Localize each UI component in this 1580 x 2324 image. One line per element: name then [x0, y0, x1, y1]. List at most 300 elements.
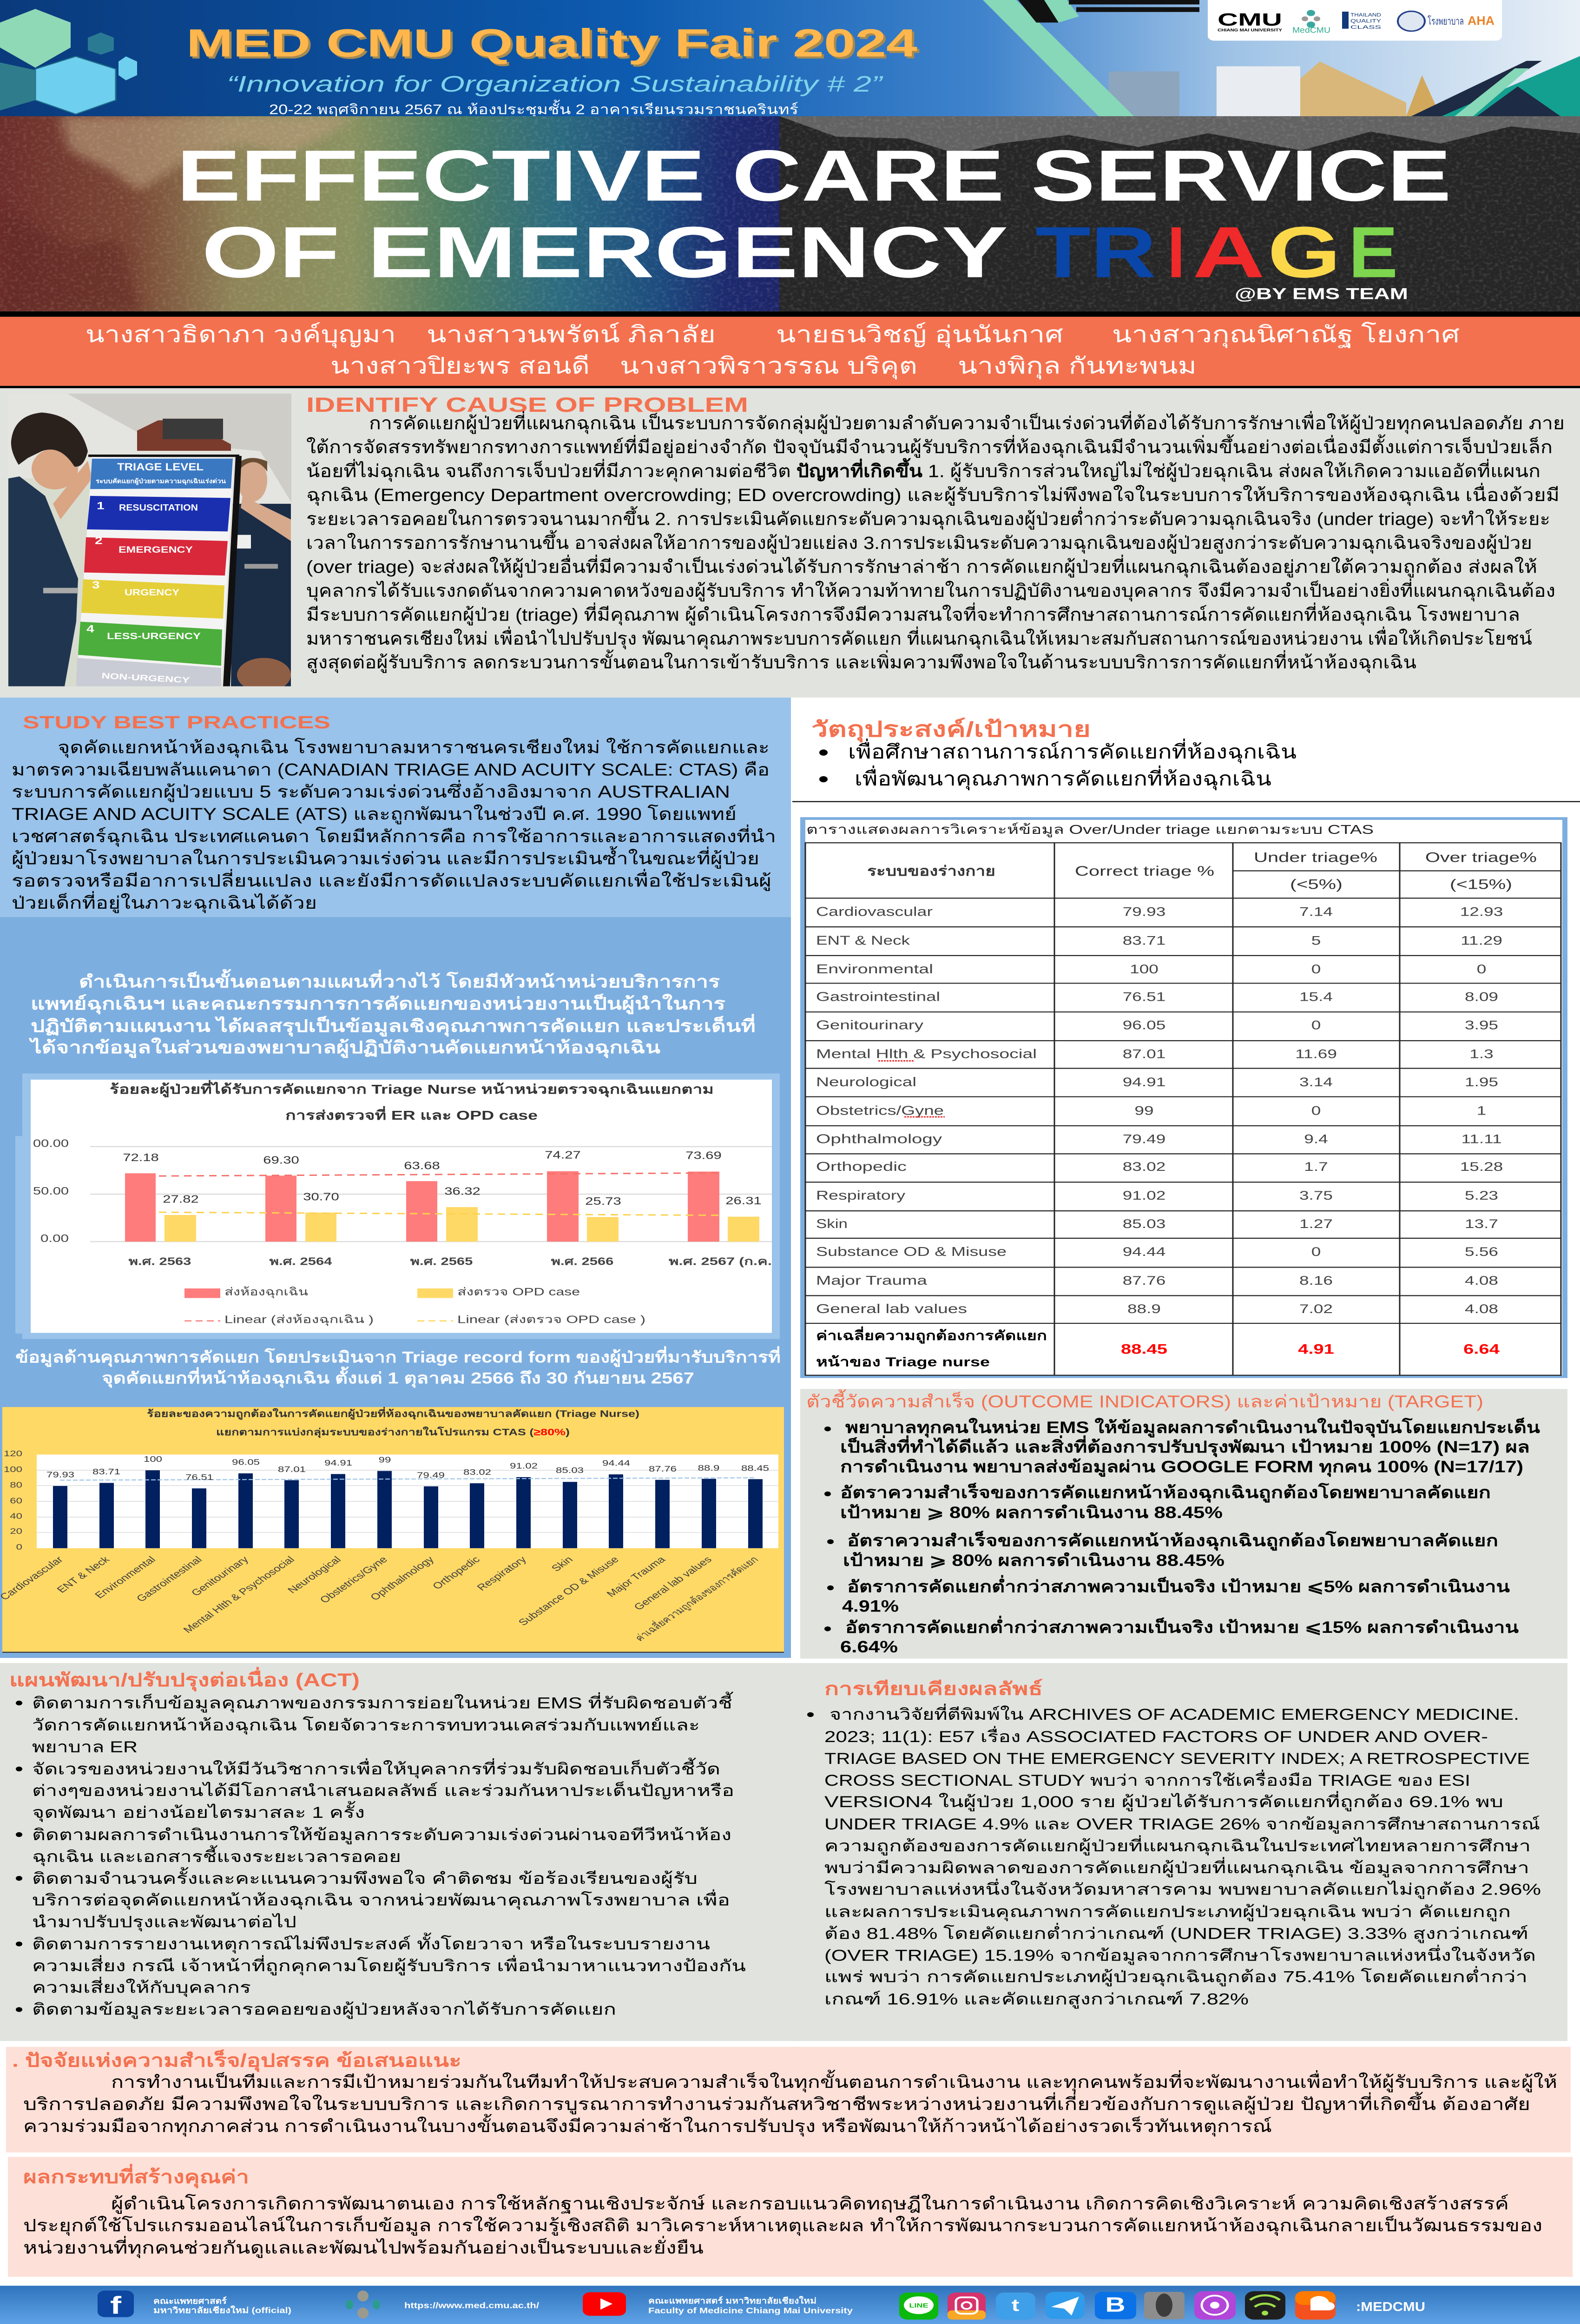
- category labels: พ.ศ. 2565: [410, 1255, 473, 1267]
- benchmarking paragraph: พบว่ามีความผิดพลาดของการคัดแยกผู้ป่วยที่แผนกฉุกเฉิน ข้อมูลจากการศึกษา: [824, 1857, 1529, 1877]
- y axis labels: 00.00: [33, 1137, 69, 1149]
- legend: Linear (ส่งห้องฉุกเฉิน ): [224, 1313, 374, 1326]
- triage level stripes: ระบบคัดแยกผู้ป่วยตามความฉุกเฉินเร่งด่วน: [96, 478, 226, 486]
- objective list: [819, 739, 1297, 791]
- implementation paragraph: แพทย์ฉุกเฉินฯ และคณะกรรมการการคัดแยกของหน่วยงานเป็นผู้นำในการ: [31, 993, 725, 1015]
- triage level stripes: 3: [92, 579, 100, 591]
- table rows: 0: [1311, 1018, 1321, 1032]
- table rows: 11.69: [1295, 1047, 1337, 1061]
- legend: Linear (ส่งตรวจ OPD case ): [457, 1313, 645, 1325]
- benchmarking paragraph: 2023; 11(1): E57 เรื่อง ASSOCIATED FACTORS OF UNDER AND OVER-: [824, 1726, 1488, 1745]
- table rows: 85.03: [1123, 1217, 1165, 1231]
- table rows: 12.93: [1460, 905, 1503, 918]
- chart title: การส่งตรวจที่ ER และ OPD case: [285, 1106, 538, 1123]
- value labels: 83.02: [463, 1468, 491, 1477]
- category labels: พ.ศ. 2567 (ก.ค.: [669, 1255, 772, 1267]
- rotated category labels: Ophthalmology: [368, 1554, 436, 1602]
- table rows: 1.3: [1469, 1047, 1494, 1061]
- rotated category labels: Neurological: [285, 1554, 343, 1595]
- improvement list: ติดตามข้อมูลระยะเวลารอคอยของผู้ป่วยหลังจากได้รับการคัดแยก: [32, 2000, 616, 2019]
- logo box: THAILAND: [1350, 12, 1381, 18]
- panel: implementation and results: [0, 917, 791, 1658]
- coloured word TRIAGE: A: [1192, 212, 1265, 293]
- table rows: Cardiovascular: [816, 905, 933, 919]
- divider band: [0, 311, 1580, 317]
- objective list: เพื่อศึกษาสถานการณ์การคัดแยกที่ห้องฉุกเฉิน: [848, 739, 1297, 764]
- benchmarking paragraph: [807, 1703, 1541, 2009]
- table rows: 9.4: [1304, 1132, 1328, 1146]
- improvement list: จัดเวรของหน่วยงานให้มีวันวิชาการเพื่อให้บุคลากรที่ร่วมรับผิดชอบเก็บตัวชี้วัด: [32, 1758, 720, 1779]
- benchmarking paragraph: CROSS SECTIONAL STUDY พบว่า จากการใช้เครื่องมือ TRIAGE ของ ESI: [824, 1769, 1470, 1789]
- indicator list: การดำเนินงาน พยาบาลส่งข้อมูลผ่าน GOOGLE FORM ทุกคน 100% (N=17/17): [840, 1458, 1523, 1477]
- coloured word TRIAGE: I: [1167, 212, 1185, 293]
- heading: STUDY BEST PRACTICES: [23, 713, 330, 732]
- table average row: 4.91: [1298, 1342, 1334, 1357]
- chart title: [147, 1407, 639, 1439]
- triage level stripes: [76, 459, 233, 686]
- benchmarking paragraph: VERSION4 ในผู้ป่วย 1,000 ราย ผู้ป่วยได้รับการคัดแยกที่ถูกต้อง 69.1% พบ: [824, 1791, 1503, 1811]
- logo box: QUALITY: [1350, 18, 1381, 24]
- table header: (<15%): [1450, 877, 1512, 892]
- icon: facebook: [98, 2291, 134, 2319]
- table rows: 96.05: [1123, 1018, 1165, 1032]
- value labels: 100: [144, 1455, 162, 1464]
- table rows: [816, 905, 1503, 1316]
- table average row: 6.64: [1463, 1342, 1500, 1357]
- y axis labels: [33, 1137, 69, 1244]
- improvement list: ความเสี่ยง กรณี เจ้าหน้าที่ถูกคุกคามโดยผู้รับบริการ เพื่อนำมาหาแนวทางป้องกัน: [32, 1955, 746, 1975]
- table rows: Obstetrics/Gyne: [816, 1103, 944, 1118]
- benchmarking paragraph: โรงพยาบาลแห่งหนึ่งในจังหวัดมหาสารคาม พบพยาบาลคัดแยกไม่ถูกต้อง 2.96%: [824, 1878, 1541, 1899]
- coloured word TRIAGE: G: [1268, 212, 1341, 293]
- bars: [53, 1470, 763, 1548]
- indicator list: [824, 1418, 1540, 1656]
- y axis labels: 100: [4, 1465, 22, 1474]
- header date line: 20-22 พฤศจิกายน 2567 ณ ห้องประชุมชั้น 2 อาคารเรียนรวมราชนครินทร์: [269, 99, 798, 118]
- table rows: 5.23: [1465, 1188, 1498, 1202]
- indicator list: 4.91%: [842, 1597, 899, 1615]
- value labels: 88.9: [698, 1464, 719, 1472]
- implementation paragraph: ปฏิบัติตามแผนงาน ได้ผลสรุปเป็นข้อมูลเชิงคุณภาพการคัดแยก และประเด็นที่: [31, 1014, 756, 1037]
- table rows: 8.09: [1465, 990, 1498, 1004]
- target line: [60, 1478, 756, 1480]
- logo box: MedCMU: [1292, 26, 1330, 35]
- improvement list: ฉุกเฉิน และเอกสารชี้แจงระยะเวลารอคอย: [32, 1845, 401, 1866]
- improvement list: [16, 1692, 746, 2019]
- legend: ส่งตรวจ OPD case: [457, 1286, 580, 1298]
- value labels: 87.01: [278, 1465, 306, 1474]
- table average row: หน้าของ Triage nurse: [816, 1355, 990, 1369]
- panel: outcome indicators: [800, 1389, 1567, 1658]
- value labels: 73.69: [685, 1149, 722, 1161]
- table rows: 13.7: [1465, 1217, 1498, 1231]
- table rows: 3.14: [1299, 1075, 1333, 1089]
- logo box: CHIANG MAI UNIVERSITY: [1218, 28, 1283, 33]
- authors band: นางสาวกุณนิศาณัฐ โยงกาศ: [1112, 322, 1460, 348]
- table rows: 83.02: [1123, 1160, 1165, 1174]
- chart title: [110, 1080, 714, 1123]
- logo box: AHA: [1468, 13, 1494, 28]
- table header: Under triage%: [1254, 850, 1377, 865]
- buildings: [1109, 61, 1441, 116]
- logo box: [1208, 0, 1502, 40]
- table rows: 1.95: [1465, 1075, 1498, 1089]
- rotated category labels: Gastrointestinal: [134, 1554, 204, 1604]
- indicator list: เป้าหมาย ⩾ 80% ผลการดำเนินงาน 88.45%: [840, 1503, 1223, 1522]
- table rows: Environmental: [816, 962, 933, 977]
- heading: แผนพัฒนา/ปรับปรุงต่อเนื่อง (ACT): [9, 1667, 360, 1691]
- heading: ตัวชี้วัดความสำเร็จ (OUTCOME INDICATORS) และค่าเป้าหมาย (TARGET): [806, 1389, 1483, 1411]
- value labels: 26.31: [725, 1195, 762, 1207]
- byline: @BY EMS TEAM: [1235, 284, 1408, 303]
- value labels: 88.45: [741, 1464, 769, 1473]
- y axis labels: 20: [10, 1527, 22, 1536]
- improvement list: ความเสี่ยงให้กับบุคลากร: [32, 1976, 251, 1997]
- panel: benchmarking results: [790, 1663, 1567, 2041]
- divider band 2: [0, 386, 1580, 388]
- table rows: 7.02: [1299, 1302, 1333, 1316]
- value labels: 91.02: [510, 1461, 538, 1471]
- benchmarking paragraph: (OVER TRIAGE) 15.19% จากข้อมูลจากการศึกษาโรงพยาบาลแห่งหนึ่งในจังหวัด: [824, 1944, 1536, 1965]
- social icons: LINE: [909, 2303, 928, 2309]
- chart title: ร้อยละผู้ป่วยที่ได้รับการคัดแยกจาก Triage Nurse หน้าหน่วยตรวจฉุกเฉินแยกตาม: [110, 1080, 714, 1097]
- table rows: 1: [1477, 1103, 1486, 1117]
- table rows: ENT & Neck: [816, 933, 910, 948]
- logo box: โรงพยาบาล: [1428, 15, 1464, 27]
- body paragraph: มาตรความเฉียบพลันแคนาดา (CANADIAN TRIAGE AND ACUITY SCALE: CTAS) คือ: [12, 760, 770, 779]
- chart: ER vs OPD by year: [15, 1074, 780, 1339]
- body paragraph: ความร่วมมือจากทุกภาคส่วน การดำเนินงานในบางขั้นตอนจึงมีความล่าช้าในการปรับปรุง หรือพัฒนาให้ก้าวหน้าได้อย่างรวดเร็วทันเหตุการณ์: [23, 2113, 1272, 2137]
- table rows: 0: [1311, 1245, 1321, 1259]
- table rows: General lab values: [816, 1302, 967, 1316]
- table header: (<5%): [1290, 877, 1343, 892]
- header title: MED CMU Quality Fair 2024: [186, 21, 917, 65]
- y axis labels: 0: [16, 1543, 22, 1552]
- rotated category labels: Respiratory: [474, 1554, 529, 1592]
- value labels: 69.30: [263, 1154, 299, 1166]
- logo box: CMU: [1218, 10, 1282, 30]
- triage level stripes: LESS-URGENCY: [107, 631, 201, 641]
- icon: facebook: f: [110, 2292, 122, 2319]
- value labels: 30.70: [303, 1190, 339, 1202]
- value labels: 76.51: [185, 1473, 213, 1482]
- benchmarking paragraph: ความถูกต้องของการคัดแยกผู้ป่วยที่แผนกฉุกเฉินในประเทศไทยหลายการศึกษา: [824, 1835, 1531, 1855]
- rotated category labels: Obstetrics/Gyne: [317, 1554, 390, 1605]
- header subtitle: “Innovation for Organization Sustainability # 2”: [227, 72, 883, 97]
- body paragraph: ป่วยเด็กที่อยู่ในภาวะฉุกเฉินได้ด้วย: [12, 891, 317, 913]
- coloured word TRIAGE: E: [1349, 212, 1398, 293]
- heading: IDENTIFY CAUSE OF PROBLEM: [306, 394, 748, 416]
- body paragraph: TRIAGE AND ACUITY SCALE (ATS) และถูกพัฒนาในช่วงปี ค.ศ. 1990 โดยแพทย์: [12, 804, 737, 825]
- table rows: 0: [1311, 1103, 1321, 1117]
- benchmarking paragraph: และผลการประเมินคุณภาพการคัดแยกประเภทผู้ป่วยฉุกเฉิน พบว่า คัดแยกถูก: [824, 1902, 1511, 1921]
- value labels: 79.49: [417, 1471, 445, 1480]
- value labels: 27.82: [163, 1193, 199, 1205]
- photo: staff holding triage level banner: [8, 394, 291, 692]
- value labels: [123, 1149, 762, 1207]
- main title line 2: OF EMERGENCY: [202, 212, 1008, 293]
- table rows: 76.51: [1123, 990, 1165, 1004]
- authors band: นางสาวพิราวรรณ บริคุต: [620, 354, 917, 380]
- panel: success factors and obstacles: [6, 2047, 1571, 2152]
- panel: study best practices: [0, 698, 791, 917]
- table rows: Orthopedic: [816, 1160, 907, 1174]
- y axis labels: 50.00: [33, 1185, 69, 1197]
- table average row: ค่าเฉลี่ยความถูกต้องการคัดแยก: [816, 1326, 1047, 1344]
- triage level stripes: 4: [86, 623, 94, 634]
- category labels: [129, 1255, 772, 1267]
- heading: วัตถุประสงค์/เป้าหมาย: [811, 718, 1091, 743]
- coloured word TRIAGE: [1035, 212, 1398, 293]
- table rows: 99: [1134, 1103, 1154, 1117]
- improvement list: วัดการคัดแยกหน้าห้องฉุกเฉิน โดยจัดวาระการทบทวนเคสร่วมกับแพทย์และ: [32, 1716, 700, 1735]
- body paragraph: [306, 411, 1565, 673]
- triage level stripes: EMERGENCY: [118, 544, 193, 555]
- youtube label: คณะแพทยศาสตร์ มหาวิทยาลัยเชียงใหม่: [648, 2296, 816, 2305]
- benchmarking paragraph: จากงานวิจัยที่ตีพิมพ์ใน ARCHIVES OF ACADEMIC EMERGENCY MEDICINE.: [830, 1703, 1519, 1723]
- improvement list: ติดตามผลการดำเนินงานการให้ข้อมูลการระดับความเร่งด่วนผ่านจอทีวีหน้าห้อง: [32, 1826, 731, 1844]
- triage level stripes: NON-URGENCY: [101, 672, 190, 685]
- table rows: 15.28: [1460, 1160, 1503, 1174]
- trend lines: [159, 1173, 723, 1215]
- objective list: เพื่อพัฒนาคุณภาพการคัดแยกที่ห้องฉุกเฉิน: [855, 766, 1271, 791]
- value labels: [46, 1455, 769, 1482]
- rotated category labels: Skin: [549, 1554, 575, 1573]
- table rows: Mental Hlth & Psychosocial: [816, 1047, 1037, 1061]
- triage level stripes: 1: [97, 500, 105, 512]
- indicator list: 6.64%: [840, 1637, 898, 1656]
- value labels: 85.03: [556, 1466, 584, 1475]
- icon: hexagon cluster: [0, 9, 137, 114]
- y axis labels: 120: [4, 1449, 22, 1458]
- value labels: 83.71: [92, 1467, 120, 1476]
- caption: triage record form: ข้อมูลด้านคุณภาพการคัดแยก โดยประเมินจาก Triage record form ของผู้ป่วยที่มารับบริการที่: [15, 1346, 781, 1367]
- body paragraph: ระบบการคัดแยกผู้ป่วยแบบ 5 ระดับความเร่งด่วนซึ่งอ้างอิงมาจาก AUSTRALIAN: [12, 780, 730, 802]
- caption: triage record form: จุดคัดแยกที่หน้าห้องฉุกเฉิน ตั้งแต่ 1 ตุลาคม 2566 ถึง 30 กันยายน 2567: [102, 1367, 694, 1388]
- body paragraph: [23, 2070, 1557, 2137]
- rotated category labels: Mental Hlth & Psychosocial: [181, 1554, 297, 1635]
- table rows: 87.76: [1123, 1274, 1165, 1287]
- social icons: [899, 2291, 1336, 2319]
- icon: MedCMU logo: [346, 2291, 380, 2318]
- table rows: Ophthalmology: [816, 1132, 942, 1146]
- table rows: 15.4: [1299, 990, 1333, 1004]
- triage level stripes: 2: [95, 535, 103, 547]
- improvement list: ต่างๆของหน่วยงานได้มีโอกาสนำเสนอผลลัพธ์ และร่วมกันหาประเด็นปัญหาหรือ: [32, 1781, 734, 1800]
- value labels: 99: [379, 1455, 391, 1465]
- benchmarking paragraph: ต้อง 81.48% โดยคัดแยกต่ำกว่าเกณฑ์ (UNDER TRIAGE) 3.33% สูงกว่าเกณฑ์: [824, 1922, 1528, 1943]
- table rows: Genitourinary: [816, 1018, 923, 1032]
- legend: ส่งห้องฉุกเฉิน: [224, 1286, 308, 1298]
- benchmarking paragraph: UNDER TRIAGE 4.9% และ OVER TRIAGE 26% จากข้อมูลการศึกษาสถานการณ์: [824, 1815, 1540, 1834]
- y axis labels: 60: [10, 1496, 22, 1505]
- implementation paragraph: ได้จากข้อมูลในส่วนของพยาบาลผู้ปฏิบัติงานคัดแยกหน้าห้องฉุกเฉิน: [29, 1037, 660, 1058]
- value labels: 79.93: [46, 1471, 74, 1479]
- table rows: 7.14: [1299, 905, 1333, 918]
- panel: objectives: [792, 718, 1580, 802]
- decorative diagonal stripes: [983, 0, 1580, 116]
- social icons: B: [1105, 2293, 1126, 2317]
- table rows: 11.29: [1461, 933, 1502, 947]
- improvement list: ติดตามจำนวนครั้งและคะแนนความพึงพอใจ คำติดชม ข้อร้องเรียนของผู้รับ: [32, 1867, 698, 1888]
- table rows: Major Trauma: [816, 1274, 928, 1288]
- rotated category labels: ENT & Neck: [54, 1554, 112, 1595]
- value labels: 94.91: [324, 1459, 352, 1467]
- y axis labels: [4, 1449, 22, 1552]
- value labels: 36.32: [444, 1185, 481, 1197]
- table rows: 5.56: [1465, 1245, 1498, 1259]
- panel: value and impact: [8, 2157, 1573, 2277]
- heading: . ปัจจัยแห่งความสำเร็จ/อุปสรรค ข้อเสนอแนะ: [12, 2049, 461, 2072]
- y axis labels: 0.00: [40, 1232, 69, 1244]
- authors band: นางสาวนพรัตน์ ภิลาลัย: [427, 322, 716, 347]
- value labels: 94.44: [602, 1459, 630, 1468]
- panel: ACT improvement plan: [0, 1663, 797, 2041]
- table header: [867, 850, 1537, 892]
- table rows: 79.49: [1123, 1132, 1165, 1146]
- implementation paragraph: ดำเนินการเป็นขั้นตอนตามแผนที่วางไว้ โดยมีหัวหน้าหน่วยบริการการ: [79, 969, 720, 991]
- caption: triage record form: [15, 1346, 781, 1388]
- rotated category labels: [0, 1553, 761, 1644]
- triage level stripes: URGENCY: [125, 587, 179, 597]
- table rows: 8.16: [1299, 1274, 1333, 1287]
- value labels: 74.27: [545, 1149, 581, 1161]
- table rows: 88.9: [1127, 1302, 1161, 1316]
- y axis labels: 80: [10, 1481, 22, 1490]
- table rows: 94.91: [1123, 1075, 1165, 1089]
- rotated category labels: Orthopedic: [430, 1554, 482, 1591]
- table header: Correct triage %: [1075, 864, 1214, 879]
- indicator list: อัตราความสำเร็จของการคัดแยกหน้าห้องฉุกเฉินถูกต้องโดยพยาบาลคัดแยก: [840, 1482, 1491, 1503]
- header banner: [0, 0, 1580, 118]
- improvement list: ติดตามการรายงานเหตุการณ์ไม่พึงประสงค์ ทั้งโดยวาจา หรือในระบบรายงาน: [32, 1933, 710, 1954]
- improvement list: จุดพัฒนา อย่างน้อยไตรมาสละ 1 ครั้ง: [32, 1801, 365, 1822]
- icon: youtube: [583, 2292, 626, 2316]
- rotated category labels: General lab values: [631, 1554, 714, 1612]
- improvement list: บริการต่อจุดคัดแยกหน้าห้องฉุกเฉิน จากหน่วยพัฒนาคุณภาพโรงพยาบาล เพื่อ: [32, 1889, 730, 1909]
- indicator list: เป็นสิ่งที่ทำได้ดีแล้ว และสิ่งที่ต้องการปรับปรุงพัฒนา เป้าหมาย 100% (N=17) ผล: [840, 1435, 1530, 1457]
- website url: https://www.med.cmu.ac.th/: [404, 2301, 539, 2310]
- body paragraph: หน่วยงานที่ทุกคนช่วยกันดูแลและพัฒนไปพร้อมกันอย่างเป็นระบบและยั่งยืน: [23, 2236, 704, 2258]
- table rows: Substance OD & Misuse: [816, 1245, 1007, 1259]
- bars: [125, 1171, 759, 1241]
- youtube label: [648, 2296, 853, 2315]
- improvement list: นำมาปรับปรุงและพัฒนาต่อไป: [32, 1913, 296, 1932]
- footer: [0, 2286, 1580, 2324]
- body paragraph: จุดคัดแยกหน้าห้องฉุกเฉิน โรงพยาบาลมหาราชนครเชียงใหม่ ใช้การคัดแยกและ: [58, 738, 770, 758]
- table rows: 1.27: [1299, 1217, 1333, 1231]
- youtube label: Faculty of Medicine Chiang Mai University: [648, 2306, 853, 2315]
- category labels: พ.ศ. 2566: [551, 1255, 613, 1267]
- table header: Over triage%: [1425, 850, 1537, 865]
- table rows: 91.02: [1123, 1188, 1165, 1202]
- heading: ผลกระทบที่สร้างคุณค่า: [23, 2164, 249, 2188]
- improvement list: ติดตามการเก็บข้อมูลคุณภาพของกรรมการย่อยในหน่วย EMS ที่รับผิดชอบตัวชี้: [32, 1692, 734, 1713]
- authors band: นางสาวปิยะพร สอนดี: [330, 354, 590, 379]
- rotated category labels: Major Trauma: [604, 1554, 668, 1599]
- table rows: Skin: [816, 1217, 848, 1231]
- title panel: [0, 116, 1580, 311]
- heading: การเทียบเคียงผลลัพธ์: [824, 1679, 1043, 1699]
- table rows: 4.08: [1465, 1302, 1498, 1316]
- value labels: 63.68: [404, 1159, 440, 1171]
- table rows: Neurological: [816, 1075, 916, 1089]
- chart: triage accuracy by body system: [0, 1407, 784, 1653]
- implementation paragraph: [29, 969, 756, 1058]
- body paragraph: เวชศาสตร์ฉุกเฉิน ประเทศแคนดา โดยมีหลักการคือ การใช้อาการและอาการแสดงที่นำ: [12, 825, 776, 847]
- body paragraph: รอตรวจหรือมีอาการเปลี่ยนแปลง และยังมีการดัดแปลงระบบคัดแยกเพื่อใช้ประเมินผู้: [12, 869, 771, 891]
- table average row: [816, 1326, 1500, 1369]
- panel: data table: [800, 817, 1567, 1378]
- social icons: t: [1012, 2296, 1020, 2315]
- table rows: 11.11: [1461, 1132, 1502, 1146]
- authors band: นางพิกุล กันทะพนม: [958, 354, 1197, 380]
- value labels: 72.18: [123, 1151, 159, 1163]
- benchmarking paragraph: เกณฑ์ 16.91% และคัดแยกสูงกว่าเกณฑ์ 7.82%: [824, 1990, 1249, 2009]
- improvement list: พยาบาล ER: [32, 1738, 138, 1756]
- indicator list: อัตราการคัดแยกต่ำกว่าสภาพความเป็นจริง เป้าหมาย ⩽5% ผลการดำเนินงาน: [847, 1575, 1510, 1596]
- indicator list: อัตราความสำเร็จของการคัดแยกหน้าห้องฉุกเฉินถูกต้องโดยพยาบาลคัดแยก: [847, 1531, 1498, 1551]
- chart title: ร้อยละของความถูกต้องในการคัดแยกผู้ป่วยที่ห้องฉุกเฉินของพยาบาลคัดแยก (Triage Nurse): [147, 1407, 639, 1420]
- body paragraph: [23, 2194, 1542, 2258]
- table rows: 79.93: [1123, 905, 1165, 918]
- authors band: [0, 317, 1580, 386]
- rotated category labels: Genitourinary: [189, 1554, 251, 1598]
- table grid: [805, 843, 1561, 1375]
- table rows: 1.7: [1304, 1160, 1328, 1174]
- indicator list: อัตราการคัดแยกต่ำกว่าสภาพความเป็นจริง เป้าหมาย ⩽15% ผลการดำเนินงาน: [845, 1616, 1519, 1637]
- table rows: 0: [1477, 962, 1486, 976]
- table caption: ตารางแสดงผลการวิเคราะห์ข้อมูล Over/Under triage แยกตามระบบ CTAS: [806, 822, 1374, 838]
- facebook label: [153, 2296, 291, 2315]
- body paragraph: [12, 738, 776, 913]
- rotated category labels: Environmental: [92, 1554, 158, 1600]
- table rows: 5: [1311, 933, 1321, 947]
- table rows: Gastrointestinal: [816, 990, 940, 1004]
- authors band: นางสาวธิดาภา วงค์บุญมา: [86, 322, 396, 348]
- value labels: 87.76: [649, 1465, 677, 1473]
- table rows: Respiratory: [816, 1188, 905, 1203]
- table header: ระบบของร่างกาย: [867, 864, 995, 879]
- value labels: 25.73: [585, 1195, 621, 1207]
- rotated category labels: Substance OD & Misuse: [516, 1554, 621, 1628]
- rotated category labels: ค่าเฉลี่ยความถูกต้องของการคัดแยก: [631, 1553, 761, 1644]
- body paragraph: ผู้ป่วยมาโรงพยาบาลในการประเมินความเร่งด่วน และมีการประเมินซ้ำในขณะที่ผู้ป่วย: [12, 846, 759, 869]
- triage level stripes: RESUSCITATION: [119, 502, 198, 513]
- value labels: 96.05: [232, 1458, 260, 1467]
- logo box: CLASS: [1350, 24, 1381, 30]
- category labels: พ.ศ. 2564: [270, 1255, 332, 1267]
- table average row: 88.45: [1121, 1342, 1167, 1357]
- panel: identify cause of problem: [0, 388, 1580, 698]
- table rows: 4.08: [1465, 1274, 1498, 1287]
- facebook label: คณะแพทยศาสตร์: [153, 2296, 227, 2306]
- handle: :MEDCMU: [1356, 2300, 1425, 2314]
- table rows: 0: [1311, 962, 1321, 976]
- table rows: 87.01: [1123, 1047, 1165, 1061]
- coloured word TRIAGE: TR: [1035, 212, 1156, 293]
- main title line 1: EFFECTIVE CARE SERVICE: [177, 136, 1451, 216]
- chart title: แยกตามการแบ่งกลุ่มระบบของร่างกายในโปรแกรม CTAS (≥80%): [216, 1426, 570, 1439]
- table rows: 3.95: [1465, 1018, 1498, 1032]
- indicator list: เป้าหมาย ⩾ 80% ผลการดำเนินงาน 88.45%: [843, 1551, 1224, 1570]
- y axis labels: 40: [10, 1512, 22, 1521]
- table rows: 3.75: [1299, 1188, 1333, 1202]
- table rows: 83.71: [1123, 933, 1165, 947]
- facebook label: มหาวิทยาลัยเชียงใหม่ (official): [153, 2305, 291, 2315]
- legend: [184, 1286, 645, 1326]
- category labels: พ.ศ. 2563: [129, 1255, 191, 1267]
